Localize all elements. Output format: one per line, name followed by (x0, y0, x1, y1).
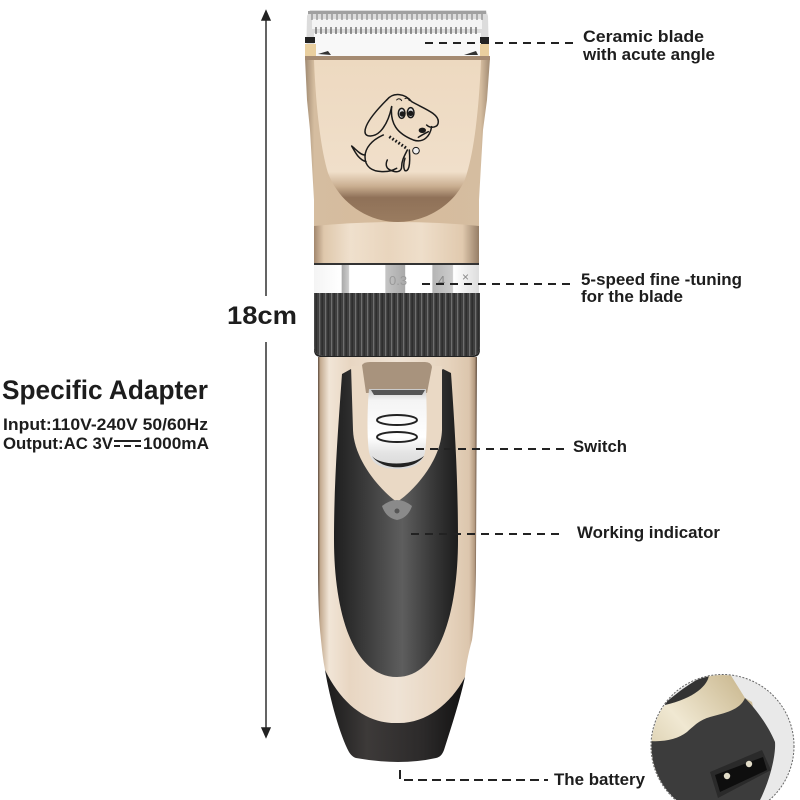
speed ring: 0.3 (389, 273, 407, 288)
leader: switch (416, 448, 566, 450)
switch (368, 389, 427, 469)
cap top (664, 675, 709, 705)
port frame (710, 750, 771, 798)
label: fine-tuning: 5-speed fine -tuning (581, 270, 742, 289)
black grip (334, 369, 458, 677)
output spec (3, 435, 209, 453)
leader: fine-tuning (422, 283, 572, 285)
label: fine-tuning (581, 270, 742, 306)
speed ring: × (462, 270, 469, 284)
adapter heading: Specific Adapter (2, 375, 208, 405)
adapter specification (2, 375, 209, 453)
label: ceramic blade (582, 27, 715, 64)
clipper illustration (305, 10, 490, 762)
inset: charging port (650, 674, 794, 800)
leader: working indicator (411, 533, 565, 535)
label: ceramic blade: with acute angle (582, 45, 715, 64)
label: ceramic blade: Ceramic blade (583, 27, 704, 46)
knurled dial (314, 293, 480, 357)
label: fine-tuning: for the blade (581, 287, 683, 306)
label: working indicator: Working indicator (577, 523, 720, 542)
height label: 18cm (227, 302, 297, 330)
switch grip oval lower (377, 432, 417, 442)
port (715, 757, 767, 792)
clipper blade (305, 10, 489, 60)
gold shell (652, 675, 753, 780)
input spec: Input:110V-240V 50/60Hz (3, 416, 208, 434)
label: battery: The battery (554, 770, 646, 789)
output spec: Output:AC 3V (3, 435, 113, 453)
working indicator light (382, 500, 412, 520)
black base (650, 698, 775, 800)
clipper body (318, 357, 477, 762)
dog logo (352, 95, 438, 172)
switch surround (351, 366, 442, 502)
switch grip oval upper (377, 415, 417, 425)
height arrow (262, 11, 270, 737)
leader: ceramic blade (425, 42, 575, 44)
speed ring (314, 263, 479, 293)
output spec: 1000mA (143, 435, 209, 453)
label: switch: Switch (573, 437, 627, 456)
leader: battery (400, 770, 548, 780)
switch housing (362, 362, 432, 393)
speed ring: 4 (438, 273, 445, 288)
clipper head (305, 56, 490, 266)
